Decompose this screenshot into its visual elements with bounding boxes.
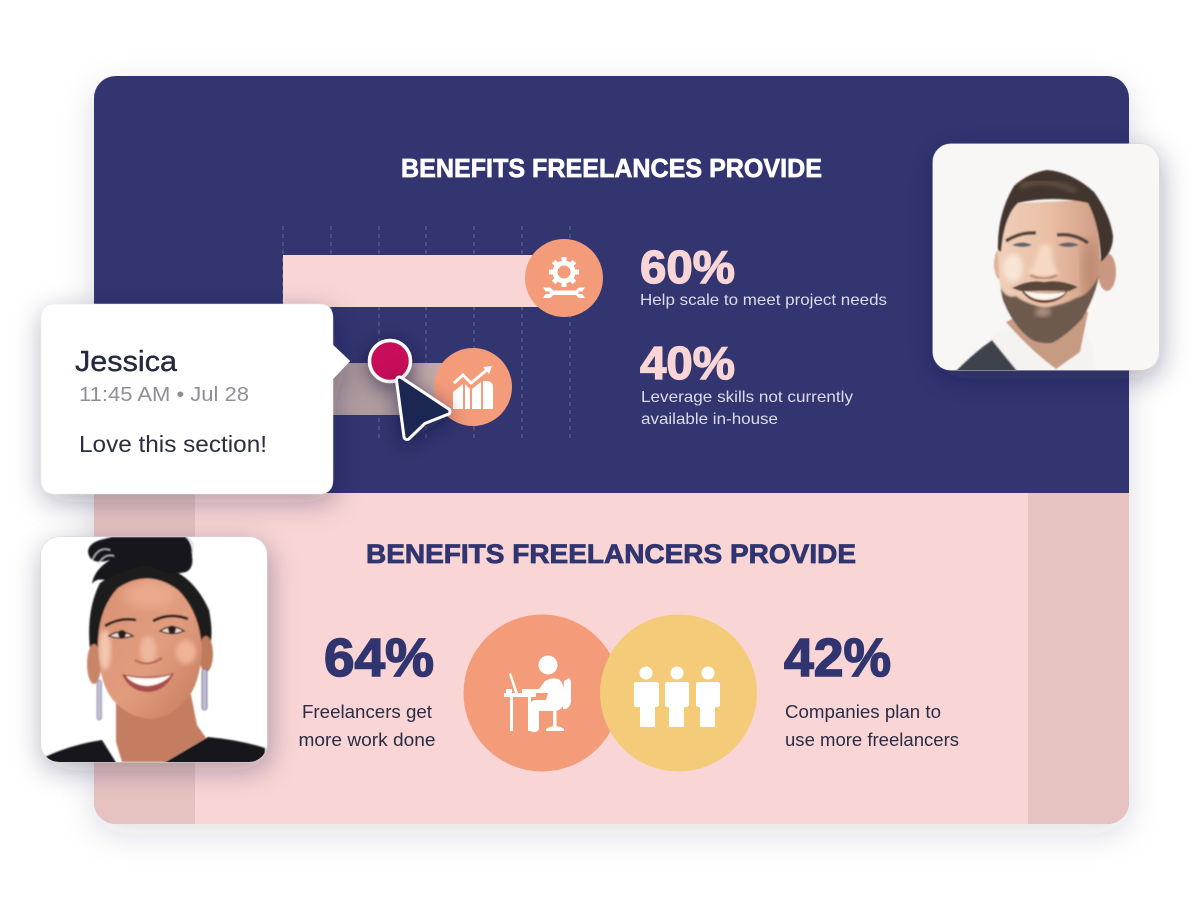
stat: 42 percent: 42% [784,628,891,688]
heading: top section: BENEFITS FREELANCES PROVIDE [401,153,822,183]
icon: three people [600,614,757,772]
smile [122,673,174,692]
heading: bottom section: BENEFITS FREELANCERS PROVIDE [366,539,856,569]
stat: 60 percent [640,241,887,309]
face skin [998,200,1101,308]
stat: 64 percent [298,628,436,750]
stat: 60 percent: Help scale to meet project needs [640,292,887,309]
hair [89,565,212,655]
stat: 40 percent: available in-house [641,411,778,428]
panel: infographic card [94,76,1129,824]
eyes [109,632,133,638]
icon: cursor arrow [400,380,447,436]
eyes [1012,242,1032,247]
icon: gear and wrench [525,239,603,317]
bun [88,537,192,584]
stat: 64 percent: Freelancers get [302,702,432,722]
beard [1000,276,1099,344]
earrings [97,680,102,720]
stat: 64 percent: more work done [298,730,436,750]
shirt [985,340,1046,370]
stat: 40 percent: Leverage skills not currently [641,389,853,406]
commenter name: Jessica [75,346,178,378]
comment text: Love this section! [79,431,267,457]
comment timestamp: 11:45 AM • Jul 28 [79,384,249,406]
nose [140,636,156,664]
mouth [1021,290,1068,303]
jacket [955,340,1018,372]
icon: comment pin [370,340,410,382]
neck [116,690,206,762]
stat: 64 percent: 64% [324,628,434,688]
bar: 60 percent [283,255,543,307]
stat: 40 percent: 40% [640,337,735,389]
black top [45,737,265,764]
comment popup [41,304,350,494]
photo: smiling man [933,144,1159,372]
stat: 60 percent: 60% [640,241,735,293]
chart: horizontal bars [283,226,603,440]
stat: 40 percent [640,337,853,428]
stat: 42 percent: Companies plan to [785,702,941,722]
nose [1029,245,1058,277]
icon: growth chart [434,348,512,426]
stat: 42 percent [784,628,959,750]
face skin [98,578,202,719]
neck [1006,310,1089,370]
brows [1006,233,1036,241]
brows [105,619,136,626]
stat: 42 percent: use more freelancers [785,730,959,750]
photo: smiling woman [41,537,267,764]
bar: 40 percent [283,363,453,415]
hair [998,170,1113,262]
icon: freelancer at desk [464,614,620,772]
